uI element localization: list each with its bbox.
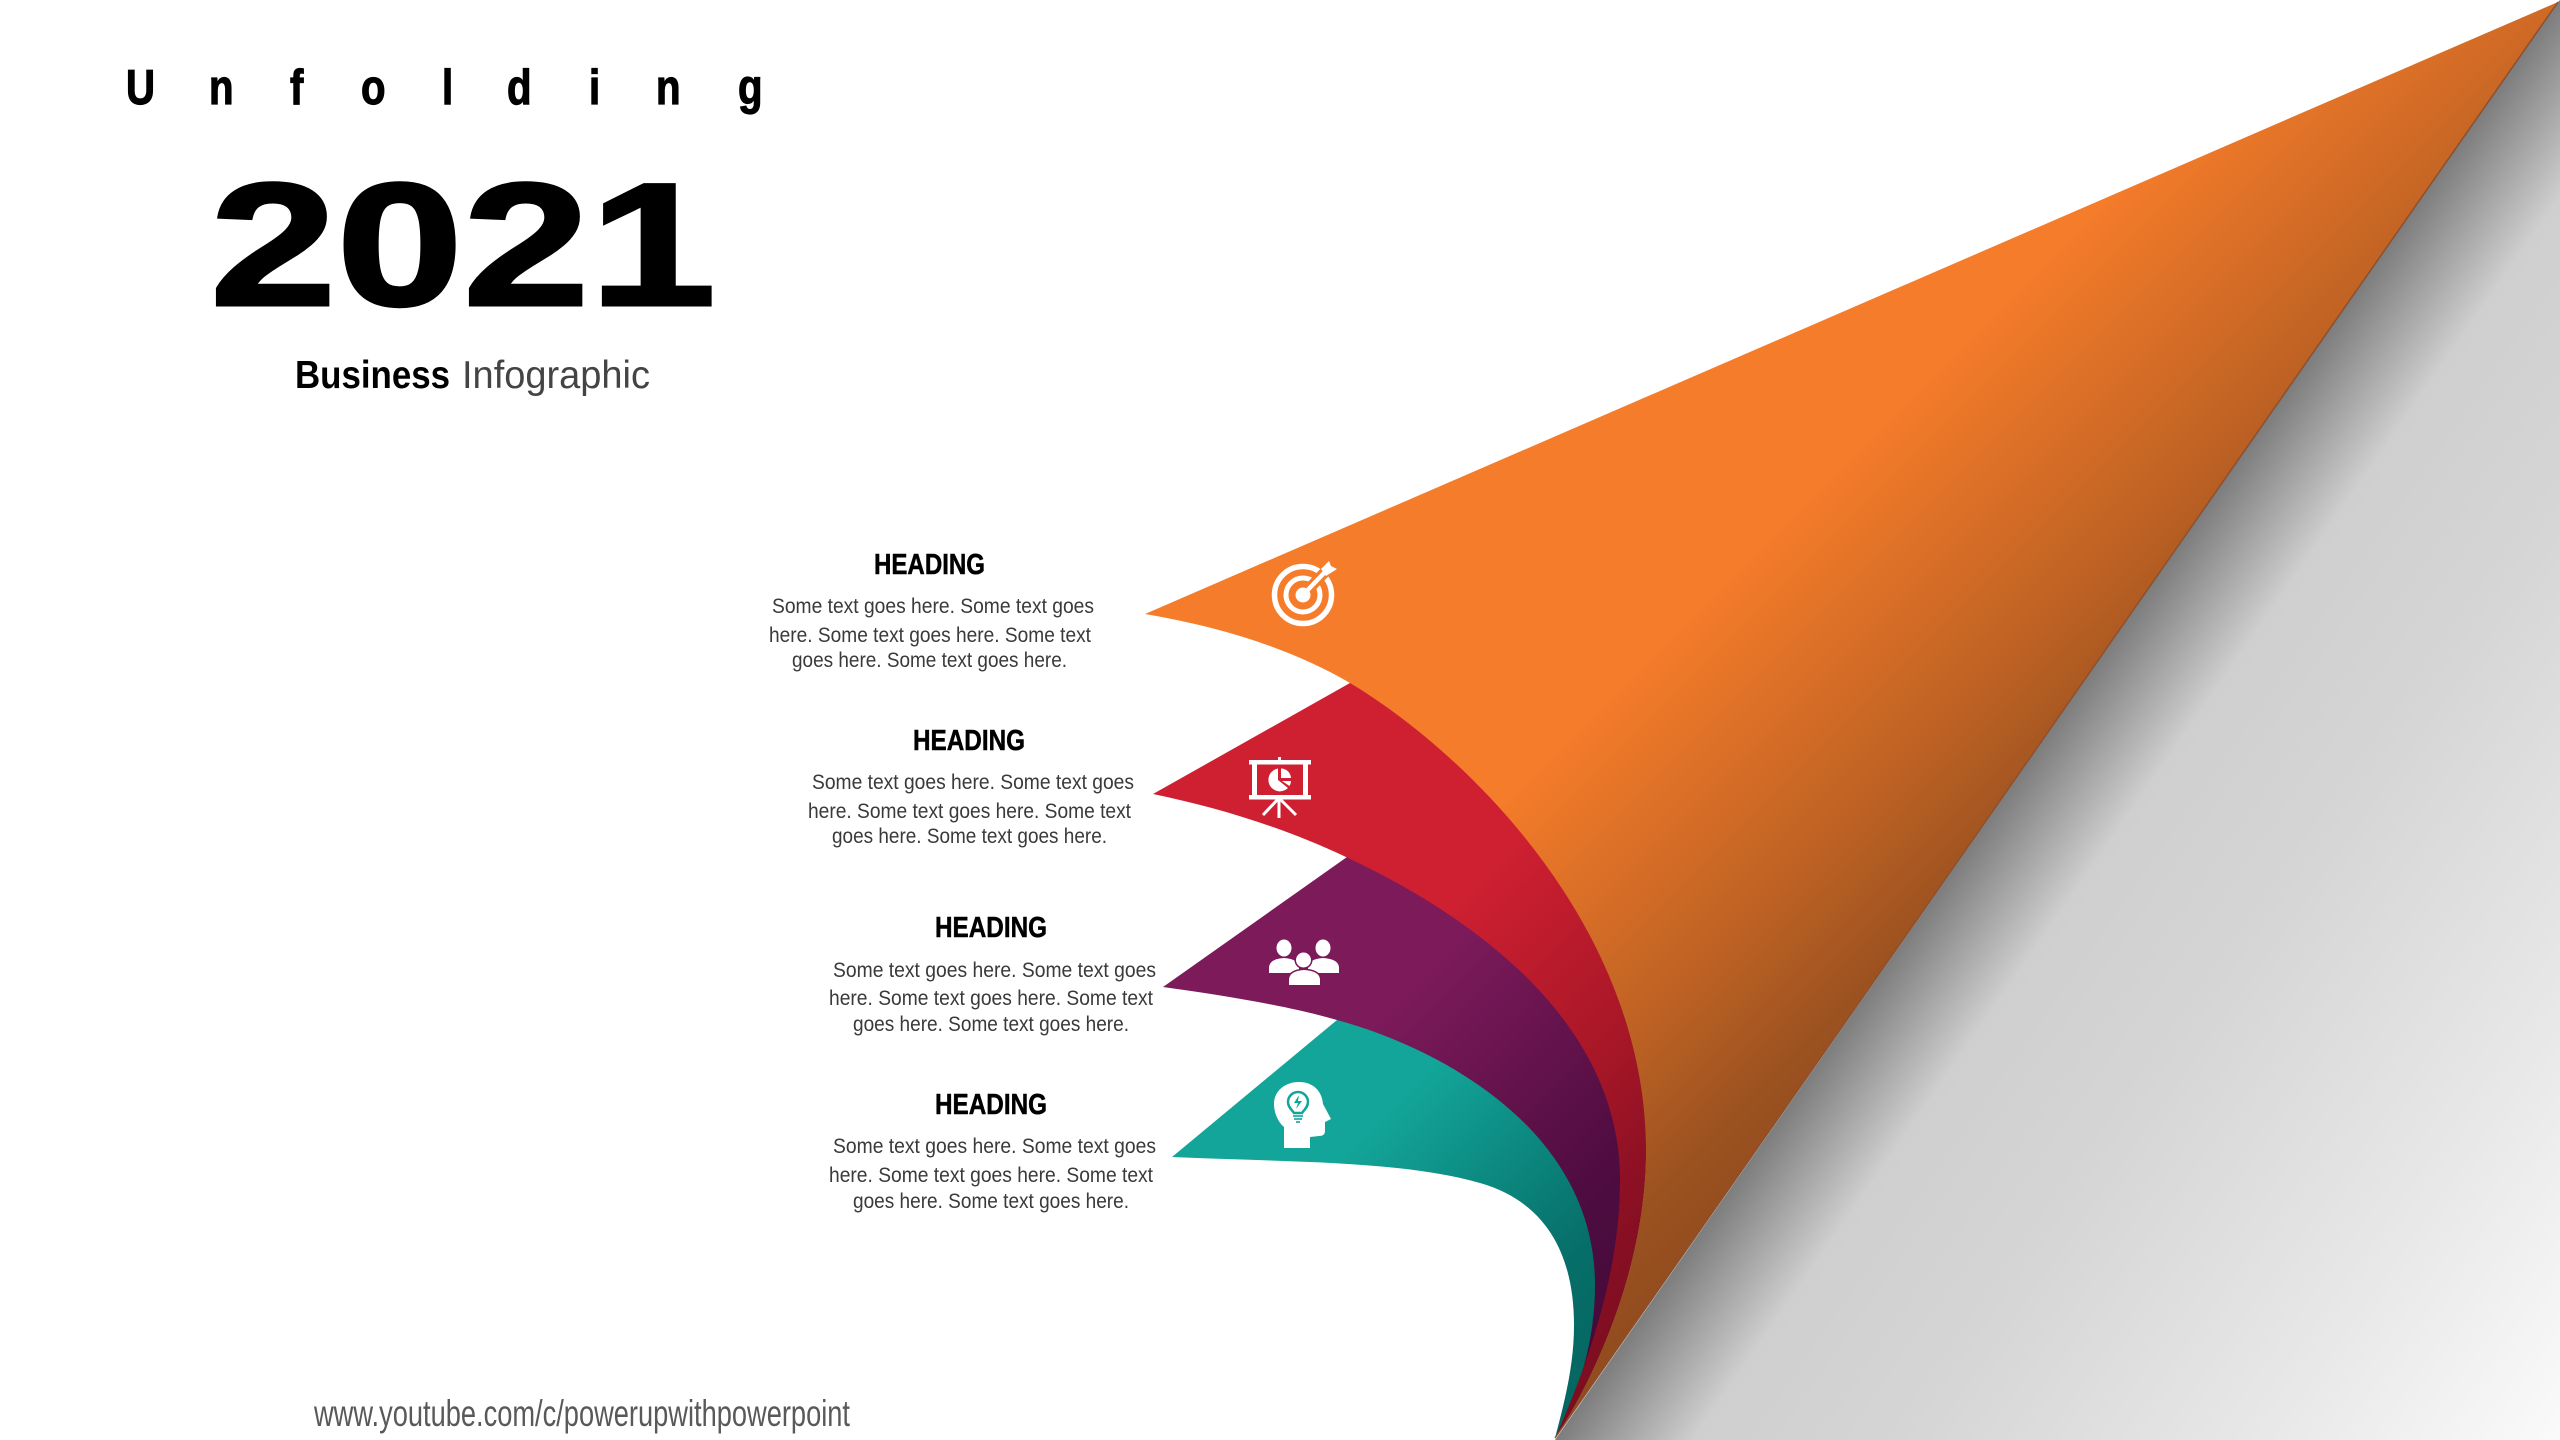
icon: head with lightbulb	[1274, 1082, 1331, 1148]
subtitle light: Infographic	[462, 354, 650, 397]
icon: target	[1274, 561, 1337, 624]
body 1	[769, 595, 1094, 672]
icon: presentation board	[1249, 757, 1311, 818]
body 1: goes here. Some text goes here.	[792, 649, 1067, 672]
icon: people group	[1269, 940, 1339, 985]
body 2: here. Some text goes here. Some text	[808, 800, 1131, 823]
layer: red	[1153, 650, 1750, 1438]
subtitle	[295, 354, 650, 397]
body 4: here. Some text goes here. Some text	[829, 1164, 1153, 1187]
layer: purple	[1163, 700, 1750, 1438]
body 2: Some text goes here. Some text goes	[812, 771, 1134, 794]
layer: teal	[1172, 1000, 1646, 1438]
text block 2	[808, 725, 1134, 848]
body 4: Some text goes here. Some text goes	[833, 1135, 1156, 1158]
text block 3	[829, 912, 1156, 1036]
body 3: Some text goes here. Some text goes	[833, 959, 1156, 982]
body 3	[829, 959, 1156, 1036]
page curl shadow panel	[1555, 0, 2560, 1440]
body 2: goes here. Some text goes here.	[832, 825, 1107, 848]
body 4	[829, 1135, 1156, 1213]
body 1: Some text goes here. Some text goes	[772, 595, 1094, 618]
subtitle bold: Business	[295, 354, 450, 397]
fold edge line	[1555, 2, 2558, 1438]
body 3: here. Some text goes here. Some text	[829, 987, 1153, 1010]
body 2	[808, 771, 1134, 848]
heading 4: HEADING	[935, 1089, 1047, 1121]
unfolded layers	[1145, 2, 2558, 1438]
heading 3: HEADING	[935, 912, 1047, 944]
heading 2: HEADING	[913, 725, 1025, 757]
layer: orange	[1145, 2, 2558, 1438]
body 4: goes here. Some text goes here.	[853, 1190, 1129, 1213]
title: 2021: 2021	[210, 148, 716, 343]
body 3: goes here. Some text goes here.	[853, 1013, 1129, 1036]
footer url: www.youtube.com/c/powerupwithpowerpoint	[313, 1393, 851, 1434]
title: Unfolding: Unfolding	[126, 60, 763, 115]
text block 4	[829, 1089, 1156, 1213]
heading 1: HEADING	[874, 549, 985, 581]
body 1: here. Some text goes here. Some text	[769, 624, 1091, 647]
text block 1	[769, 549, 1094, 672]
